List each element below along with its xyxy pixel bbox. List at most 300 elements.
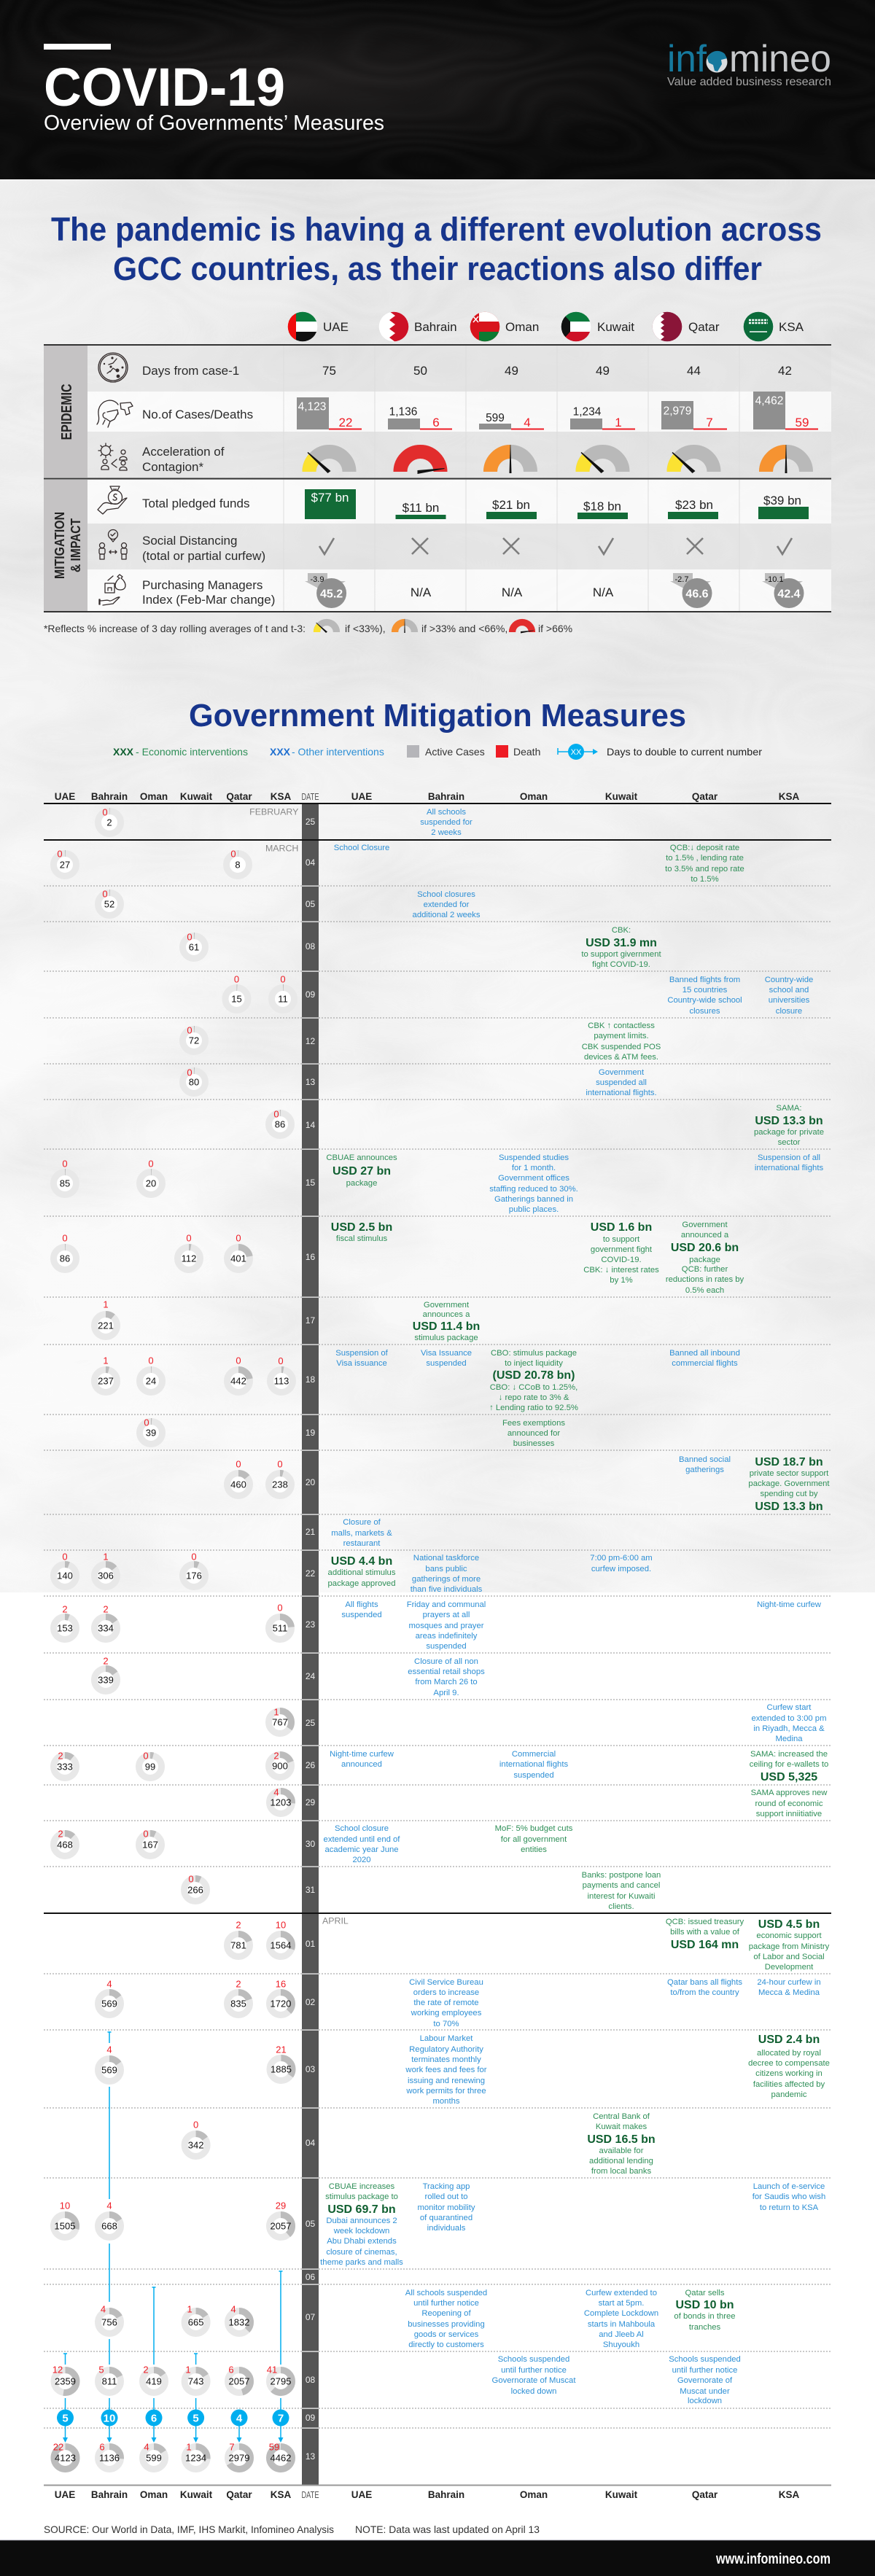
row values: days from case-1: 49	[596, 364, 610, 378]
measure: KSA Mar 20: USD 18.7 bn	[755, 1456, 823, 1468]
measure: Bahrain Mar 17	[413, 1301, 480, 1342]
donut chart: Bahrain Apr 07: 4	[101, 2304, 106, 2314]
donut chart: Kuwait Apr 07: 1	[187, 2304, 192, 2314]
donut chart: KSA Apr 03	[270, 2044, 292, 2081]
label: cases and deaths: No.of Cases/Deaths	[142, 408, 253, 421]
donut chart: KSA Mar 09: 11	[278, 993, 288, 1005]
measure: Oman Mar 26: Commercial	[512, 1750, 556, 1759]
PMI: Qatar: 46.6	[685, 588, 709, 601]
measure: Qatar Mar 09: Banned flights from	[669, 976, 740, 984]
bar chart: total pledged funds: $77 bn	[311, 491, 349, 505]
measure: UAE Mar 16	[331, 1221, 392, 1243]
donut chart: Bahrain Mar 18: 1	[103, 1355, 109, 1366]
measure: Oman Mar 15: for 1 month.	[512, 1164, 556, 1172]
legend	[113, 744, 762, 760]
measure: Qatar Apr 01: USD 164 mn	[671, 1939, 739, 1951]
donut chart: UAE Apr 05: 1505	[55, 2221, 75, 2231]
measure: KSA Mar 25	[751, 1703, 827, 1743]
side label: EPIDEMIC: EPIDEMIC	[58, 384, 74, 440]
row values: days from case-1: 44	[687, 364, 701, 378]
label: acceleration of contagion	[142, 445, 225, 474]
donut chart: Bahrain Apr 13: 6	[99, 2441, 105, 2453]
measure: Bahrain Mar 17: USD 11.4 bn	[413, 1320, 480, 1333]
bar chart: total pledged funds: $23 bn	[675, 498, 713, 512]
measure: Bahrain Mar 24: from March 26 to	[415, 1678, 478, 1686]
donut chart: Oman Mar 18	[140, 1355, 162, 1393]
donut chart: Qatar Mar 20: 0	[236, 1458, 241, 1470]
donut chart: Bahrain Apr 05: 4	[106, 2201, 112, 2211]
donut chart: KSA Mar 09: 0	[280, 974, 286, 984]
footer band	[0, 2540, 875, 2576]
source note: SOURCE: Our World in Data, IMF, IHS Markit, Infomineo Analysis	[44, 2524, 334, 2535]
donut chart: Kuwait Apr 13: 1	[186, 2441, 192, 2453]
donut chart: Qatar Apr 01: 2	[236, 1919, 241, 1931]
measure: Bahrain Mar 22: National taskforce	[413, 1554, 479, 1563]
label: total pledged funds: Total pledged funds	[142, 497, 249, 510]
measure: Kuwait Apr 07: Curfew extended to	[586, 2289, 657, 2297]
measure: Qatar Mar 20: Banned social	[679, 1455, 731, 1464]
donut chart: Bahrain Mar 23	[95, 1604, 117, 1639]
flag: Qatar	[652, 311, 682, 342]
donut chart: KSA Mar 23	[268, 1603, 292, 1639]
legend: XXX	[270, 746, 291, 758]
timeline header labels: Qatar	[226, 791, 252, 802]
date column: 25	[306, 1718, 315, 1728]
title: COVID-19: COVID-19	[44, 57, 285, 117]
date column: 05	[306, 2219, 315, 2229]
donut chart: Oman Mar 26: 0	[143, 1750, 149, 1762]
doubling-time connector lines	[63, 2032, 283, 2439]
side label: MITIGATION & IMPACT	[52, 512, 83, 579]
measure: Oman Mar 26: suspended	[513, 1771, 554, 1780]
donut chart: KSA Mar 18: 113	[274, 1375, 289, 1387]
measure: Kuwait Apr 04	[587, 2112, 656, 2176]
donut chart: Kuwait Apr 08	[184, 2364, 207, 2393]
donut chart: KSA Mar 25	[268, 1706, 292, 1734]
donut chart: KSA Mar 18	[270, 1355, 293, 1393]
icon: globe	[706, 51, 728, 73]
measure: Oman Mar 15: Government offices	[498, 1174, 569, 1183]
measure: UAE Mar 21: malls, markets &	[331, 1529, 392, 1538]
donut chart: KSA Mar 14: 86	[275, 1118, 285, 1130]
donut chart: Bahrain Mar 05: 0	[102, 888, 108, 900]
measure: KSA Apr 03: decree to compensate	[748, 2059, 830, 2068]
measure: Bahrain Apr 07: goods or services	[414, 2330, 479, 2339]
donut chart: Bahrain Feb 25	[98, 806, 121, 834]
measure: Kuwait Mar 08: fight COVID-19.	[592, 960, 650, 969]
measure: UAE Mar 23: suspended	[341, 1611, 382, 1619]
measure: Kuwait Mar 16: CBK: ↓ interest rates	[583, 1266, 659, 1275]
measure: KSA Mar 26: USD 5,325	[761, 1771, 817, 1783]
measure: UAE Mar 15: CBUAE announces	[326, 1153, 397, 1162]
measure: Qatar Mar 04	[665, 844, 744, 884]
legend: Days to double to current number	[607, 746, 762, 758]
donut chart: KSA Apr 13: 4462	[271, 2453, 291, 2463]
timeline header labels: Qatar	[692, 791, 718, 802]
date column: 16	[306, 1252, 315, 1262]
measure: Kuwait Apr 04: from local banks	[591, 2167, 651, 2176]
measure: Bahrain Mar 05: extended for	[424, 900, 470, 909]
measure: Kuwait Mar 31	[582, 1871, 661, 1911]
donut chart: Qatar Apr 01	[228, 1919, 249, 1957]
donut chart: KSA Mar 20	[268, 1458, 292, 1496]
donut chart: Oman Mar 30: 0	[143, 1829, 149, 1839]
measure: KSA Mar 14: USD 13.3 bn	[755, 1115, 823, 1127]
side label: MITIGATION & IMPACT: MITIGATION	[52, 512, 67, 579]
PMI: KSA	[762, 573, 804, 608]
heading: government mitigation measures: Government Mitigation Measures	[189, 698, 686, 734]
donut chart: Bahrain Mar 18: 237	[98, 1375, 114, 1387]
flag: Bahrain	[378, 311, 409, 342]
date column: 14	[306, 1120, 315, 1130]
measure: KSA Mar 14: package for private	[754, 1128, 824, 1137]
donut chart: Oman Mar 19: 0	[144, 1417, 149, 1428]
measure: UAE Mar 15: package	[346, 1179, 377, 1188]
donut chart: Kuwait Mar 13: 80	[189, 1076, 199, 1088]
measure: Qatar Apr 01	[666, 1918, 744, 1951]
donut chart: Kuwait Mar 12: 72	[189, 1035, 199, 1046]
measure: Qatar Apr 01: QCB: issued treasury	[666, 1918, 744, 1926]
gauge: Kuwait	[580, 452, 623, 473]
measure: Bahrain Apr 02	[409, 1978, 483, 2028]
donut chart: UAE Apr 05: 10	[60, 2201, 70, 2211]
measure: Qatar Mar 16: Government	[682, 1221, 728, 1229]
bar chart: cases and deaths: 59	[796, 416, 809, 429]
donut chart: Kuwait Mar 22: 176	[186, 1571, 202, 1581]
measure: Qatar Apr 07: tranches	[689, 2323, 721, 2332]
measure: UAE Mar 16: fiscal stimulus	[336, 1234, 388, 1243]
date column: 17	[306, 1315, 315, 1326]
label: purchasing managers index	[142, 578, 275, 607]
donut chart: Kuwait Mar 16: 0	[186, 1232, 192, 1244]
PMI: UAE: -3.9	[311, 575, 324, 584]
donut chart: Kuwait Mar 16	[178, 1232, 200, 1270]
footer band: www.infomineo.com	[715, 2551, 831, 2567]
donut chart: UAE Mar 26	[54, 1750, 76, 1778]
measure: UAE Mar 30	[324, 1824, 400, 1864]
measure: Bahrain Apr 02: the rate of remote	[413, 1999, 479, 2007]
donut chart: KSA Mar 26: 900	[272, 1760, 288, 1772]
measure: Bahrain Apr 07: All schools suspended	[405, 2289, 487, 2297]
measure: KSA Apr 05: Launch of e-service	[753, 2182, 825, 2191]
measure: Oman Mar 30	[495, 1824, 573, 1854]
measure: Kuwait Mar 08: USD 31.9 mn	[586, 937, 657, 949]
PMI: KSA: -10.1	[765, 575, 784, 584]
measure: Qatar Mar 04: to 1.5%	[691, 875, 719, 884]
measure: UAE Apr 05: stimulus package to	[325, 2192, 398, 2201]
measure: Kuwait Mar 31: clients.	[608, 1902, 634, 1911]
measure: Oman Mar 15	[489, 1153, 578, 1214]
measure: Kuwait Mar 08: to support givernment	[581, 950, 661, 959]
measure: Bahrain Apr 07: Reopening of	[421, 2309, 471, 2318]
measure: Bahrain Mar 05: additional 2 weeks	[413, 911, 481, 919]
measure: Kuwait Apr 04: Kuwait makes	[596, 2122, 648, 2131]
measure: UAE Mar 21	[331, 1518, 392, 1548]
measure: Kuwait Mar 22	[590, 1554, 653, 1573]
measure: Oman Mar 30: MoF: 5% budget cuts	[495, 1824, 573, 1833]
measure: KSA Mar 26: ceiling for e-wallets to	[750, 1760, 828, 1769]
label: purchasing managers index: Index (Feb-Mar change)	[142, 593, 275, 607]
measure: Bahrain Mar 17: Government	[424, 1301, 470, 1310]
donut chart: Qatar Apr 02: 2	[236, 1979, 241, 1989]
measure: Bahrain Mar 22: than five individuals	[411, 1585, 483, 1594]
heading: pandemic evolution: The pandemic is having a different evolution across	[51, 211, 822, 248]
measure: KSA Mar 09: universities	[769, 996, 810, 1005]
measure: Oman Mar 30: for all government	[501, 1835, 567, 1844]
donut chart: KSA Mar 23: 511	[273, 1623, 287, 1633]
subtitle: Overview of Governments’ Measures	[44, 112, 384, 135]
date column: 08	[306, 2375, 315, 2385]
donut chart: Bahrain Apr 08: 811	[102, 2375, 117, 2387]
donut chart: UAE Mar 04	[54, 849, 76, 876]
donut chart: UAE Mar 22: 0	[62, 1552, 68, 1562]
measure: Bahrain Mar 17: stimulus package	[414, 1334, 478, 1342]
measure: UAE Mar 18	[335, 1349, 389, 1368]
label: social distancing	[142, 534, 265, 563]
measure: Bahrain Apr 07: directly to customers	[408, 2340, 484, 2349]
footnote with gauge legend: *Reflects % increase of 3 day rolling averages of t and t-3:	[44, 623, 306, 634]
donut chart: UAE Mar 22	[54, 1552, 76, 1587]
donut chart: Qatar Mar 20	[228, 1458, 249, 1496]
donut chart: Kuwait Mar 31	[184, 1874, 207, 1902]
donut chart: Oman Mar 30: 167	[142, 1839, 158, 1851]
measure: UAE Mar 22: USD 4.4 bn	[331, 1555, 392, 1568]
donut chart: UAE Apr 08: 12	[52, 2364, 63, 2375]
flag: KSA	[743, 311, 774, 342]
measure: KSA Apr 03: facilities affected by	[753, 2080, 825, 2089]
measure: Qatar Apr 08	[669, 2355, 741, 2405]
measure: Bahrain Mar 18: suspended	[426, 1359, 467, 1368]
measure: KSA Mar 20: package. Government	[748, 1479, 830, 1488]
footnote with gauge legend: if <33%),	[345, 623, 386, 634]
donut chart: Oman Mar 19	[140, 1417, 162, 1444]
bar chart: cases and deaths: 4	[524, 416, 531, 429]
donut chart: KSA Apr 13	[269, 2441, 292, 2469]
country labels: Oman	[505, 320, 539, 334]
measure: Bahrain Apr 03: terminates monthly	[411, 2055, 481, 2064]
donut chart: KSA Mar 29	[270, 1786, 292, 1814]
donut chart: Bahrain Mar 22	[95, 1552, 117, 1587]
donut chart: KSA Mar 26	[268, 1750, 292, 1778]
table bands	[44, 344, 831, 612]
donut chart: KSA Mar 20: 238	[272, 1479, 288, 1490]
bar chart: cases and deaths: 2,979	[664, 405, 691, 417]
timeline footer labels: UAE	[55, 2489, 75, 2500]
donut chart: Bahrain Apr 08: 5	[98, 2364, 104, 2375]
measure: UAE Apr 05: theme parks and malls	[320, 2258, 403, 2267]
timeline footer labels: Oman	[520, 2489, 548, 2500]
measure: Qatar Apr 07	[674, 2289, 736, 2332]
measure: Kuwait Apr 04: additional lending	[589, 2157, 653, 2166]
measure: UAE Mar 30: academic year June	[324, 1845, 399, 1854]
measure: KSA Apr 02: Mecca & Medina	[758, 1988, 820, 1997]
country labels: Qatar	[688, 320, 720, 334]
donut chart: KSA Mar 23: 0	[277, 1603, 283, 1613]
measure: Oman Mar 15: Suspended studies	[499, 1153, 569, 1162]
icon: money bag in hand	[98, 486, 127, 514]
measure: Bahrain Apr 02: Civil Service Bureau	[409, 1978, 483, 1987]
measure: Bahrain Apr 05	[417, 2182, 475, 2233]
donut chart: UAE Mar 30: 2	[58, 1829, 63, 1839]
row values: days from case-1: 42	[778, 364, 792, 378]
icon: contagion people	[98, 443, 127, 470]
measure: Oman Mar 18: ↑ Lending ratio to 92.5%	[489, 1404, 578, 1412]
date column: 25	[306, 817, 315, 827]
donut chart: Qatar Apr 07	[228, 2304, 251, 2333]
donut chart: Bahrain Apr 03: 4	[106, 2044, 112, 2055]
donut chart: Kuwait Mar 31: 266	[187, 1884, 203, 1896]
bar chart: total pledged funds: $11 bn	[402, 501, 439, 515]
measure: Oman Apr 08: Schools suspended	[498, 2355, 569, 2364]
bar chart: total pledged funds: $21 bn	[492, 498, 530, 512]
donut chart: Qatar Mar 04: 8	[235, 859, 241, 871]
measure: Qatar Mar 16: reductions in rates by	[666, 1275, 744, 1284]
measure: Bahrain Apr 07	[405, 2289, 487, 2349]
donut chart: KSA Apr 01: 1564	[271, 1939, 291, 1951]
date column: 06	[306, 2272, 315, 2282]
measure: Bahrain Apr 07: until further notice	[413, 2299, 479, 2308]
measure: Bahrain Apr 03	[405, 2034, 487, 2106]
gauges: acceleration of contagion	[308, 445, 806, 474]
donut chart: UAE Mar 26: 2	[58, 1750, 63, 1762]
measure: Kuwait Mar 16: to support	[603, 1235, 640, 1244]
measure: Bahrain Apr 05: monitor mobility	[417, 2203, 475, 2212]
measure: Qatar Apr 08: until further notice	[672, 2366, 737, 2375]
timeline footer labels: DATE	[302, 2489, 319, 2500]
measure: Kuwait Mar 12: CBK suspended POS	[582, 1043, 661, 1051]
measure: Bahrain Mar 24: April 9.	[433, 1689, 459, 1697]
measure: KSA Apr 01: Development	[765, 1963, 814, 1972]
donut chart: UAE Mar 30: 468	[57, 1839, 73, 1851]
legend: - Economic interventions	[136, 746, 248, 758]
donut chart: Oman Mar 26: 99	[145, 1762, 155, 1772]
timeline footer labels: Oman	[140, 2489, 168, 2500]
measure: Oman Mar 18: to inject liquidity	[505, 1359, 563, 1368]
date column: 30	[306, 1839, 315, 1849]
donut chart: Kuwait Apr 08: 1	[185, 2364, 191, 2375]
measure: Kuwait Mar 12: devices & ATM fees.	[584, 1053, 658, 1062]
donut chart: UAE Apr 13: 22	[53, 2441, 63, 2453]
donut chart: UAE Apr 05	[54, 2201, 76, 2237]
donut chart: Qatar Apr 02	[228, 1979, 249, 2015]
measure: KSA Apr 03: citizens working in	[755, 2069, 822, 2078]
donut chart: Oman Apr 13: 4	[144, 2441, 149, 2453]
measure: KSA Mar 15: Suspension of all	[758, 1153, 820, 1162]
donut chart: KSA Apr 02	[270, 1979, 292, 2015]
PMI: Bahrain, Oman, Kuwait not available: N/A	[411, 585, 432, 599]
measure: Bahrain Apr 03: months	[432, 2097, 460, 2106]
flag: UAE	[287, 311, 318, 342]
timeline footer labels: UAE	[351, 2489, 372, 2500]
donut chart: UAE Apr 08	[52, 2364, 77, 2393]
donut chart: Bahrain Apr 03	[98, 2044, 121, 2081]
measure: KSA Apr 03: pandemic	[771, 2090, 807, 2099]
measure: KSA Mar 09: Country-wide	[765, 976, 813, 984]
measure: Qatar Mar 09: 15 countries	[682, 986, 728, 995]
measure: Kuwait Mar 16	[583, 1221, 659, 1285]
donut chart: Kuwait Mar 13: 0	[187, 1067, 192, 1078]
label: social distancing: (total or partial curfew)	[142, 549, 265, 563]
measure: Kuwait Mar 12: payment limits.	[594, 1032, 649, 1040]
donut chart: Bahrain Apr 13: 1136	[99, 2453, 120, 2463]
donut chart: Kuwait Mar 16: 112	[182, 1253, 196, 1264]
days to double markers: 10	[104, 2412, 115, 2425]
donut chart: UAE Mar 23	[54, 1604, 76, 1639]
legend: XXX	[113, 746, 134, 758]
measure: Bahrain Feb 25: 2 weeks	[431, 828, 462, 837]
measure: Qatar Apr 07: USD 10 bn	[675, 2299, 734, 2311]
donut chart: Oman Apr 08: 2	[143, 2364, 149, 2375]
donut chart: Bahrain Apr 08	[98, 2364, 121, 2393]
measure: Bahrain Feb 25	[420, 808, 472, 837]
donut chart: Bahrain Mar 17: 221	[98, 1320, 114, 1331]
donut chart: KSA Mar 29: 4	[273, 1786, 279, 1798]
days to double markers: 5	[192, 2412, 199, 2425]
measure: Oman Mar 18: ↓ repo rate to 3% &	[499, 1393, 569, 1402]
date column: 23	[306, 1619, 315, 1630]
donut chart: KSA Mar 26: 2	[273, 1750, 279, 1762]
measure: UAE Mar 26: announced	[341, 1760, 382, 1769]
measure: UAE Mar 22: package approved	[328, 1579, 395, 1588]
donut chart: Qatar Apr 01: 781	[230, 1939, 246, 1951]
measure: Bahrain Mar 23: prayers at all	[423, 1611, 470, 1619]
timeline header labels: DATE	[302, 791, 319, 802]
donut chart: Qatar Mar 18	[228, 1355, 249, 1393]
measure: UAE Mar 15	[326, 1153, 397, 1188]
measure: KSA Mar 25: Curfew start	[767, 1703, 812, 1712]
PMI: Bahrain, Oman, Kuwait not available: N/A	[502, 585, 523, 599]
measure: Bahrain Apr 03: Labour Market	[420, 2034, 473, 2043]
donut chart: Kuwait Mar 31: 0	[188, 1874, 194, 1884]
timeline header labels: UAE	[55, 791, 75, 802]
donut chart: Bahrain Mar 05: 52	[104, 898, 114, 910]
date column: 03	[306, 2064, 315, 2074]
donut chart: Kuwait Apr 13: 1234	[185, 2453, 206, 2463]
donut chart: Kuwait Apr 08: 743	[188, 2375, 203, 2387]
row values: days from case-1: 75	[322, 364, 336, 378]
measure: Bahrain Apr 03: work permits for three	[405, 2087, 486, 2096]
measure: Bahrain Apr 03: issuing and renewing	[408, 2077, 485, 2085]
measure: Kuwait Mar 08	[581, 926, 661, 969]
measure: KSA Mar 14: sector	[778, 1138, 801, 1147]
measure: Qatar Apr 08: Muscat under	[680, 2387, 730, 2396]
date column	[302, 803, 319, 2485]
PMI: UAE: 45.2	[320, 588, 343, 601]
measure: Kuwait Mar 31: payments and cancel	[583, 1881, 660, 1890]
label: social distancing: Social Distancing	[142, 534, 237, 548]
days to double markers: 7	[278, 2412, 284, 2425]
measure: Oman Mar 15: staffing reduced to 30%.	[489, 1185, 578, 1194]
row values: days from case-1: 49	[505, 364, 518, 378]
legend: XX	[571, 748, 582, 757]
donut chart: Qatar Apr 07: 4	[230, 2304, 236, 2314]
donut chart: KSA Apr 02: 16	[276, 1979, 286, 1989]
donut chart: Oman Mar 15: 20	[146, 1178, 156, 1188]
measure: Bahrain Apr 02: to 70%	[433, 2020, 459, 2028]
legend: Death	[513, 746, 540, 758]
measure: KSA Apr 05	[752, 2182, 825, 2212]
label: days from case-1: Days from case-1	[142, 364, 239, 378]
measure: Oman Mar 18: (USD 20.78 bn)	[493, 1369, 575, 1382]
bar chart: total pledged funds	[305, 489, 809, 519]
measure: UAE Mar 21: Closure of	[343, 1518, 381, 1527]
measure: UAE Mar 18: Visa issuance	[336, 1359, 387, 1368]
measure: KSA Apr 01: package from Ministry	[749, 1942, 830, 1951]
measure: Kuwait Apr 04: USD 16.5 bn	[587, 2133, 656, 2146]
date column: 26	[306, 1760, 315, 1770]
measure: Kuwait Mar 31: interest for Kuwaiti	[588, 1892, 655, 1901]
measure: KSA Mar 20: USD 13.3 bn	[755, 1501, 823, 1513]
